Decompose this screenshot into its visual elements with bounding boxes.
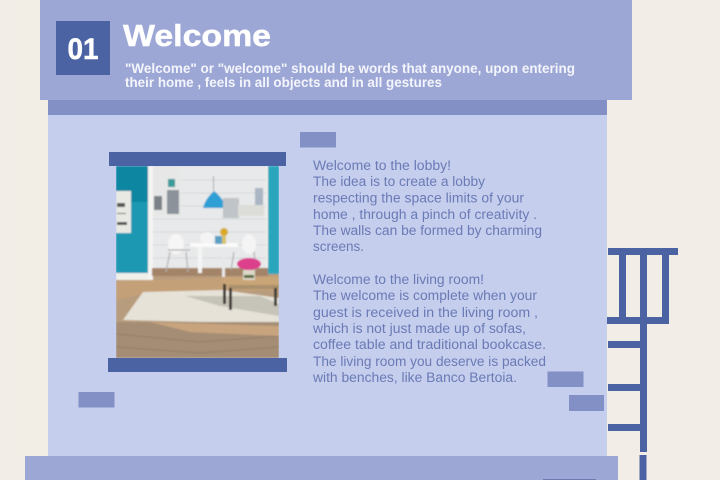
text block: lobby: Welcome to the lobby! bbox=[313, 158, 451, 173]
photo: living room bbox=[116, 166, 279, 358]
header shadow strip bbox=[48, 100, 607, 115]
title: Welcome bbox=[123, 18, 271, 53]
text block: living room: coffee table and traditional bookcase. bbox=[313, 337, 546, 352]
subtitle: "Welcome" or "welcome" should be words that anyone, upon entering bbox=[125, 60, 575, 76]
text block: lobby: The walls can be formed by charming bbox=[313, 223, 542, 238]
text block: living room: which is not just made up of sofas, bbox=[312, 321, 526, 336]
brick bbox=[548, 372, 584, 387]
ladder bbox=[607, 248, 678, 480]
text block: lobby: screens. bbox=[313, 239, 364, 254]
number badge: 01 bbox=[68, 33, 98, 66]
photo frame bottom bar bbox=[108, 358, 287, 372]
text block: lobby: The idea is to create a lobby bbox=[313, 174, 485, 189]
text block: lobby: respecting the space limits of your bbox=[313, 190, 525, 206]
panel: room wall bbox=[48, 115, 607, 456]
photo frame top bar bbox=[109, 152, 286, 166]
panel: next section band bbox=[25, 456, 618, 480]
text block: living room: The welcome is complete when your bbox=[313, 288, 538, 303]
text block: living room: The living room you deserve is packed bbox=[313, 354, 546, 369]
text block: living room: with benches, like Banco Bertoia. bbox=[312, 370, 517, 385]
brick bbox=[300, 132, 336, 148]
next section strip bbox=[543, 479, 596, 480]
panel: header bbox=[40, 0, 632, 100]
number badge bbox=[56, 21, 110, 75]
text block: living room: guest is received in the living room , bbox=[313, 305, 538, 320]
subtitle bbox=[125, 60, 575, 90]
text block: lobby: home , through a pinch of creativity . bbox=[313, 207, 537, 222]
text block: lobby bbox=[313, 158, 542, 254]
text block: living room: Welcome to the living room! bbox=[313, 272, 484, 287]
text block: living room bbox=[312, 272, 546, 385]
brick bbox=[569, 395, 604, 411]
brick bbox=[78, 392, 114, 408]
subtitle: their home , feels in all objects and in all gestures bbox=[125, 74, 442, 90]
